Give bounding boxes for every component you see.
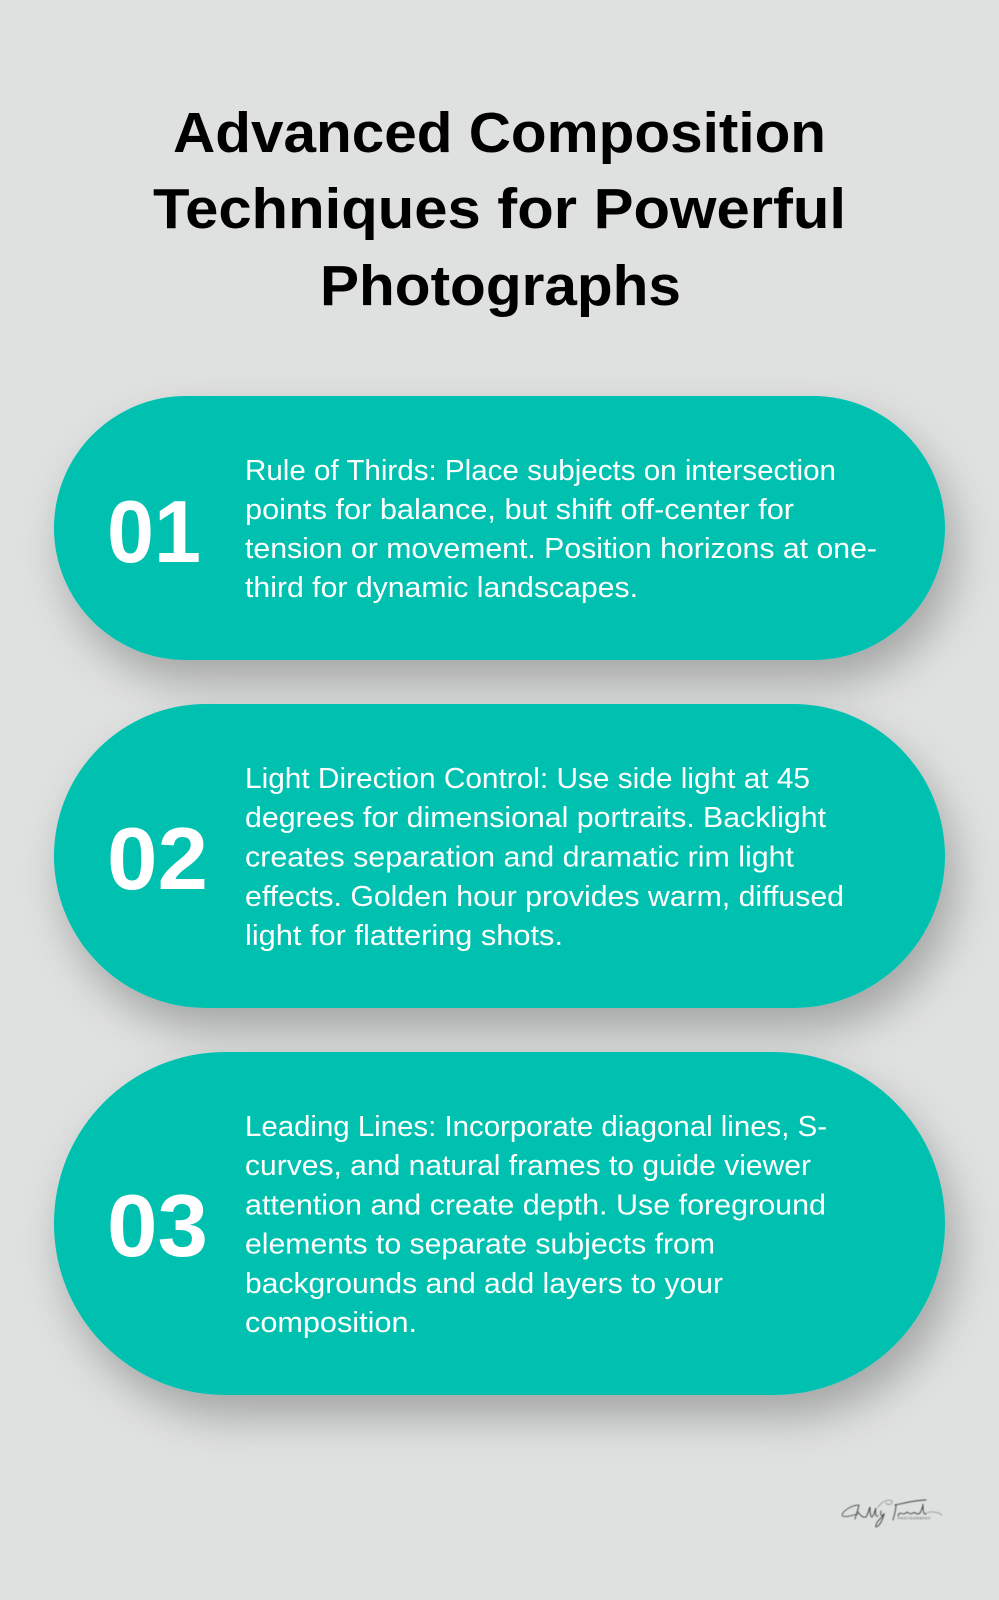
text block 01: third for dynamic landscapes. <box>245 572 638 604</box>
text block 01 <box>245 455 877 604</box>
text block 01: tension or movement. Position horizons at one- <box>245 533 877 565</box>
text block 03: curves, and natural frames to guide viewer <box>245 1150 812 1182</box>
text block 01: points for balance, but shift off-center for <box>245 494 795 526</box>
text block 02: Light Direction Control: Use side light at 45 <box>245 763 810 795</box>
text block 03: Leading Lines: Incorporate diagonal lines, S- <box>245 1111 827 1143</box>
title: Photographs <box>320 254 681 318</box>
number 01: 01 <box>107 482 201 581</box>
title: Techniques for Powerful <box>153 177 846 241</box>
number 03: 03 <box>107 1176 208 1275</box>
text block 02: creates separation and dramatic rim light <box>245 842 794 874</box>
text block 01: Rule of Thirds: Place subjects on intersection <box>245 455 836 487</box>
text block 02: degrees for dimensional portraits. Backlight <box>245 802 826 834</box>
panel: step 02 light direction control <box>54 704 945 1008</box>
text block 03: backgrounds and add layers to your <box>245 1268 724 1300</box>
title <box>153 101 846 318</box>
text block 02 <box>245 763 844 952</box>
pill background 02 <box>54 704 945 1008</box>
text block 03: attention and create depth. Use foreground <box>245 1190 826 1222</box>
panel: step 01 rule of thirds <box>54 396 945 660</box>
text block 03: composition. <box>245 1307 417 1339</box>
text block 03 <box>245 1111 827 1339</box>
pill background 03 <box>54 1052 945 1395</box>
pill background 01 <box>54 396 945 660</box>
text block 02: light for flattering shots. <box>245 920 563 952</box>
panel: step 03 leading lines <box>54 1052 945 1395</box>
text block 02: effects. Golden hour provides warm, diffused <box>245 881 844 913</box>
number 02: 02 <box>107 809 208 908</box>
title: Advanced Composition <box>173 101 826 165</box>
logo: signature <box>842 1500 942 1527</box>
logo wordmark: PHOTOGRAPHY <box>898 1516 931 1520</box>
text block 03: elements to separate subjects from <box>245 1228 715 1260</box>
